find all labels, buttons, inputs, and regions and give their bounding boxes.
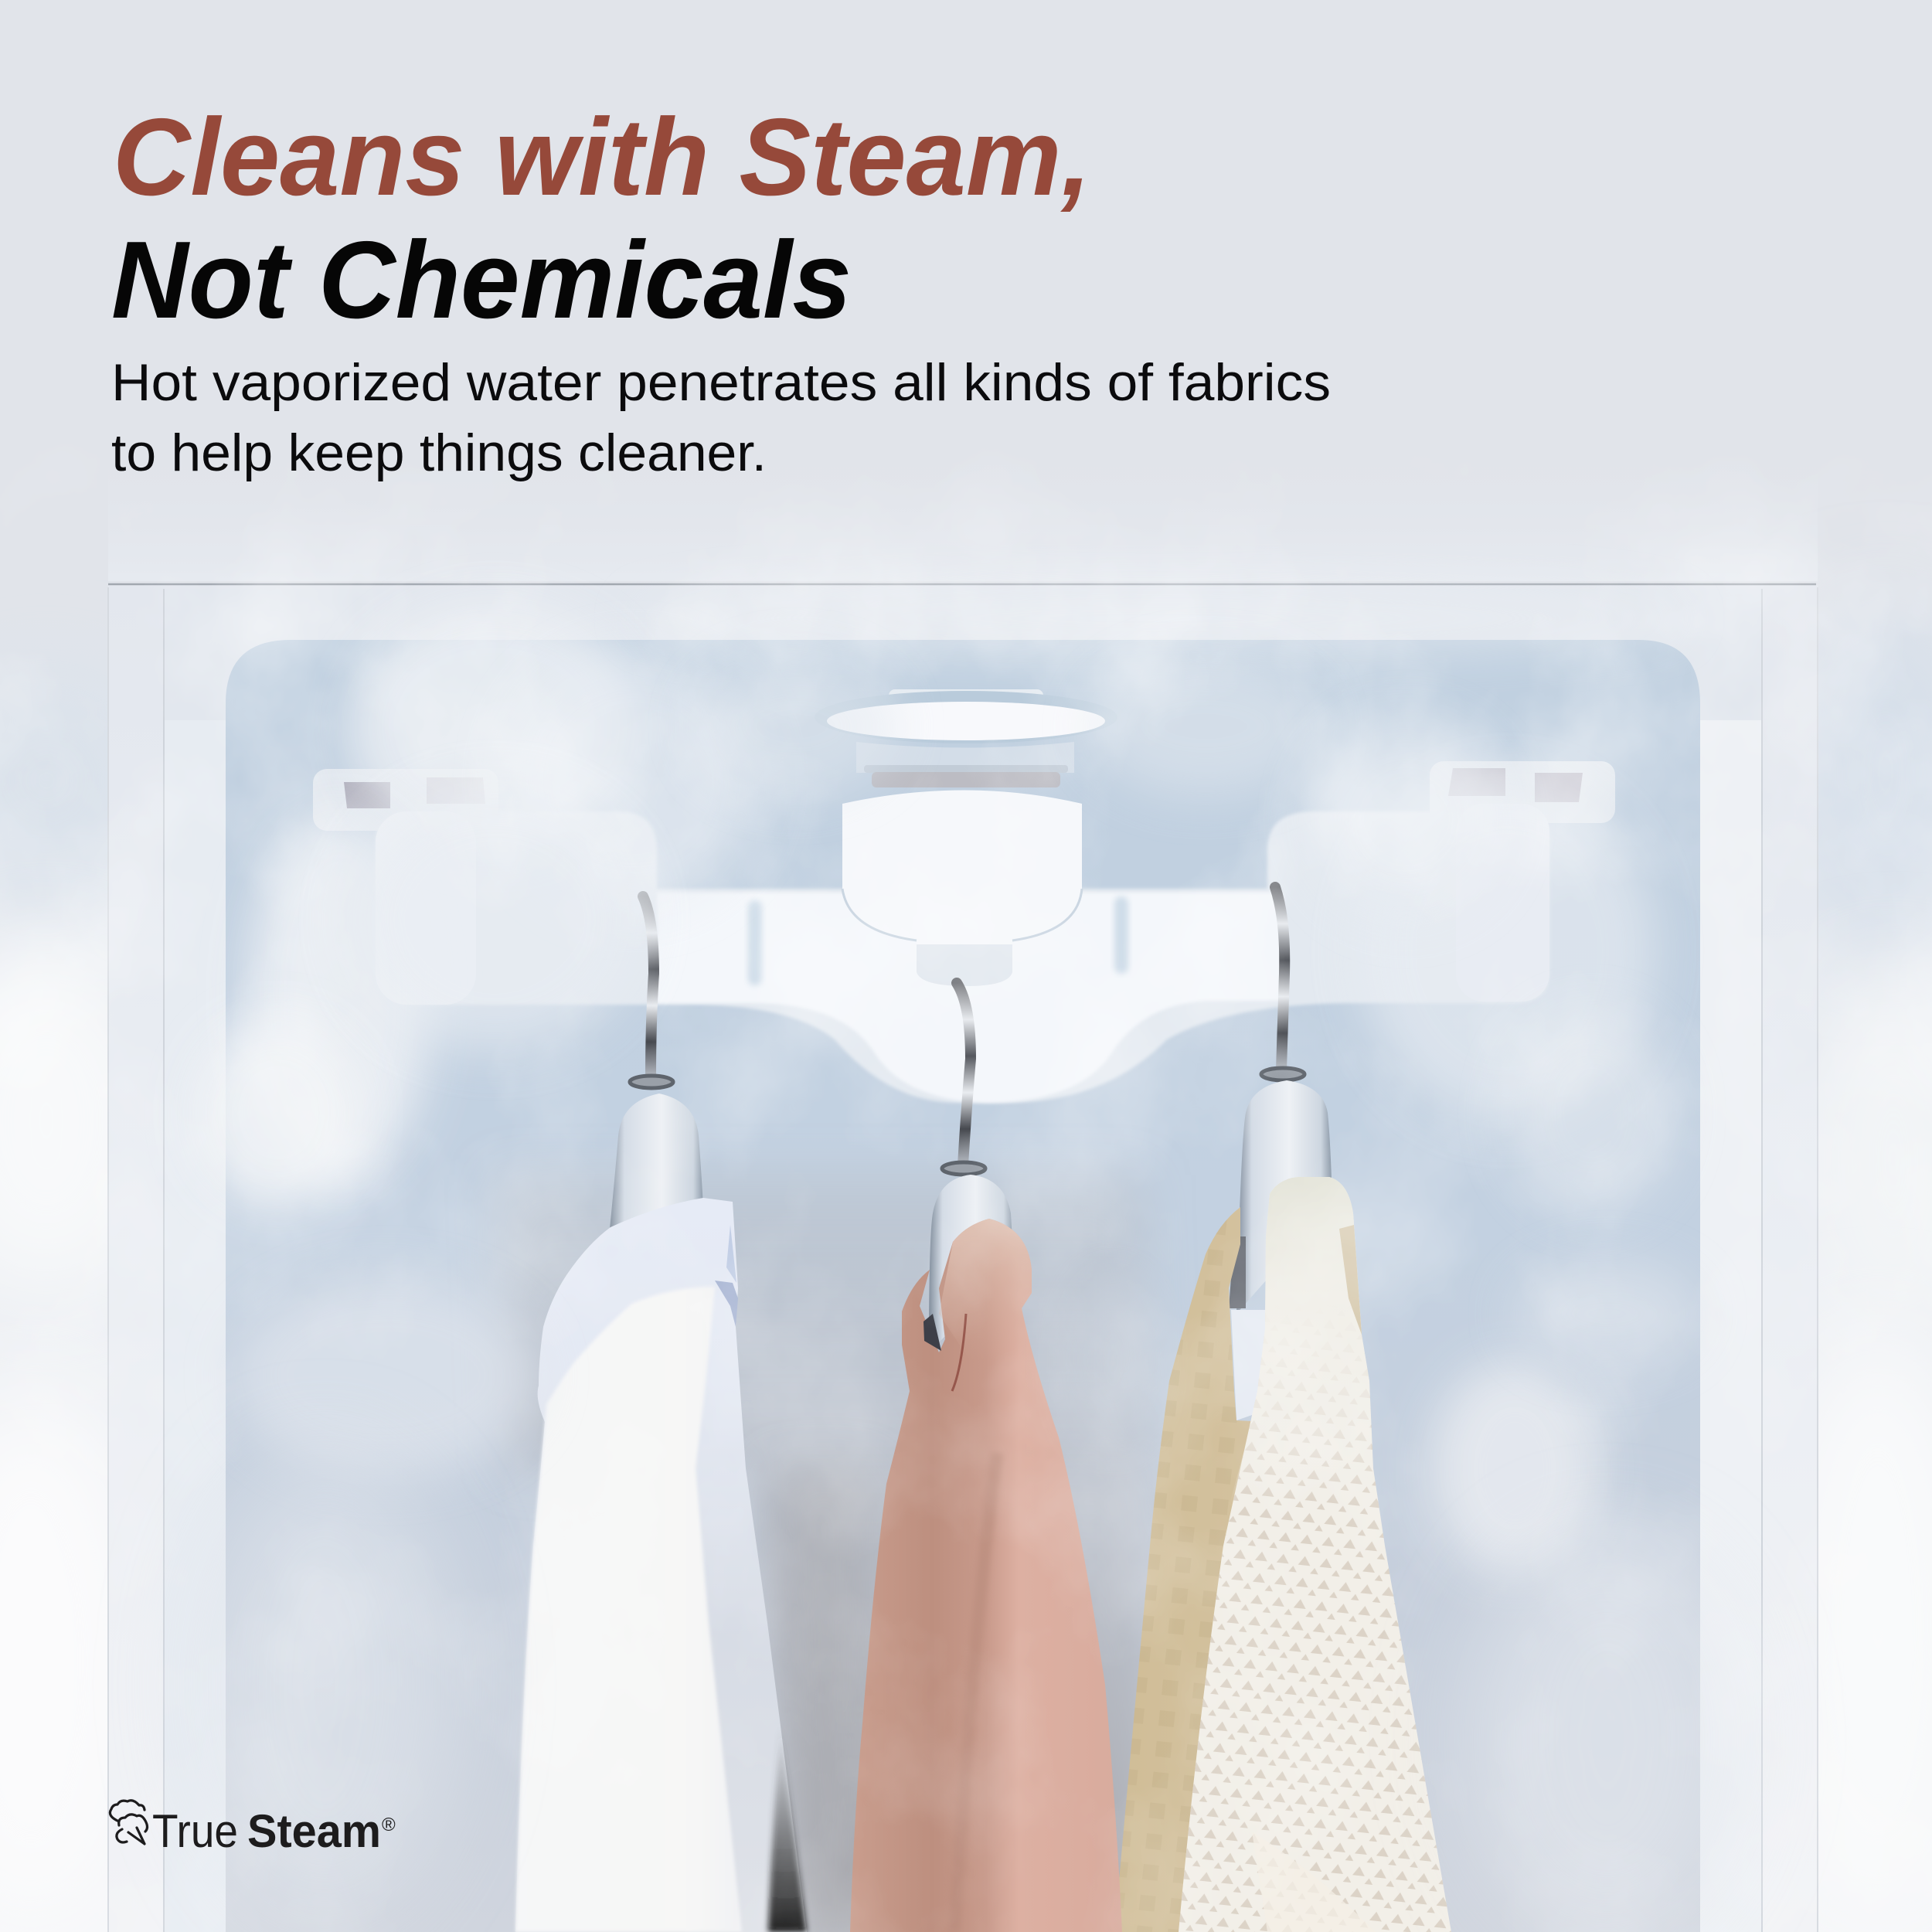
- beige towel: [1114, 1207, 1267, 1932]
- TrueSteam logo: [110, 1801, 396, 1857]
- title line: cleans with steam: Cleans with Steam,: [113, 96, 1091, 219]
- interior back wall: [226, 640, 1700, 1932]
- TrueSteam logo: Steam: [247, 1805, 381, 1857]
- shirt silhouette and collar: [515, 1198, 807, 1932]
- description: [111, 353, 1331, 482]
- description: to help keep things cleaner.: [111, 423, 767, 482]
- left hook: [630, 896, 673, 1088]
- white shirt: [515, 1198, 807, 1932]
- side steam outside the appliance: [0, 603, 1932, 1932]
- ceiling ring light: [815, 689, 1117, 743]
- pink blouse: [850, 1219, 1122, 1932]
- appliance top band: [108, 433, 1818, 581]
- white waffle robe: [1179, 1177, 1451, 1932]
- icon: steam cloud: [110, 1801, 147, 1844]
- right hanger head: [1229, 1080, 1332, 1420]
- steam nozzle collar: [856, 742, 1074, 787]
- right hook: [1261, 887, 1304, 1080]
- description: Hot vaporized water penetrates all kinds of fabrics: [111, 353, 1331, 412]
- shirt collar fold: [715, 1281, 738, 1327]
- shirt front: [515, 1287, 742, 1932]
- shirt dark fold shadow: [768, 1723, 807, 1932]
- steam nozzle bowl: [842, 790, 1082, 986]
- left vent with grey slots: [313, 769, 498, 831]
- steam texture: [107, 581, 1885, 1932]
- right vent with grey slots: [1430, 761, 1615, 823]
- hanger manifold: [376, 804, 1549, 1103]
- registered mark: ®: [382, 1815, 396, 1835]
- center hanger head: [929, 1175, 1014, 1352]
- left hanger head: [609, 1094, 705, 1236]
- title line: not chemicals: Not Chemicals: [111, 219, 852, 342]
- steam clouds: [193, 581, 1747, 1932]
- title: [111, 96, 1091, 342]
- center hook: [942, 983, 985, 1175]
- appliance frame: [108, 584, 1818, 1932]
- grey shadow behind garments: [495, 1175, 1159, 1932]
- TrueSteam logo: True: [152, 1805, 238, 1857]
